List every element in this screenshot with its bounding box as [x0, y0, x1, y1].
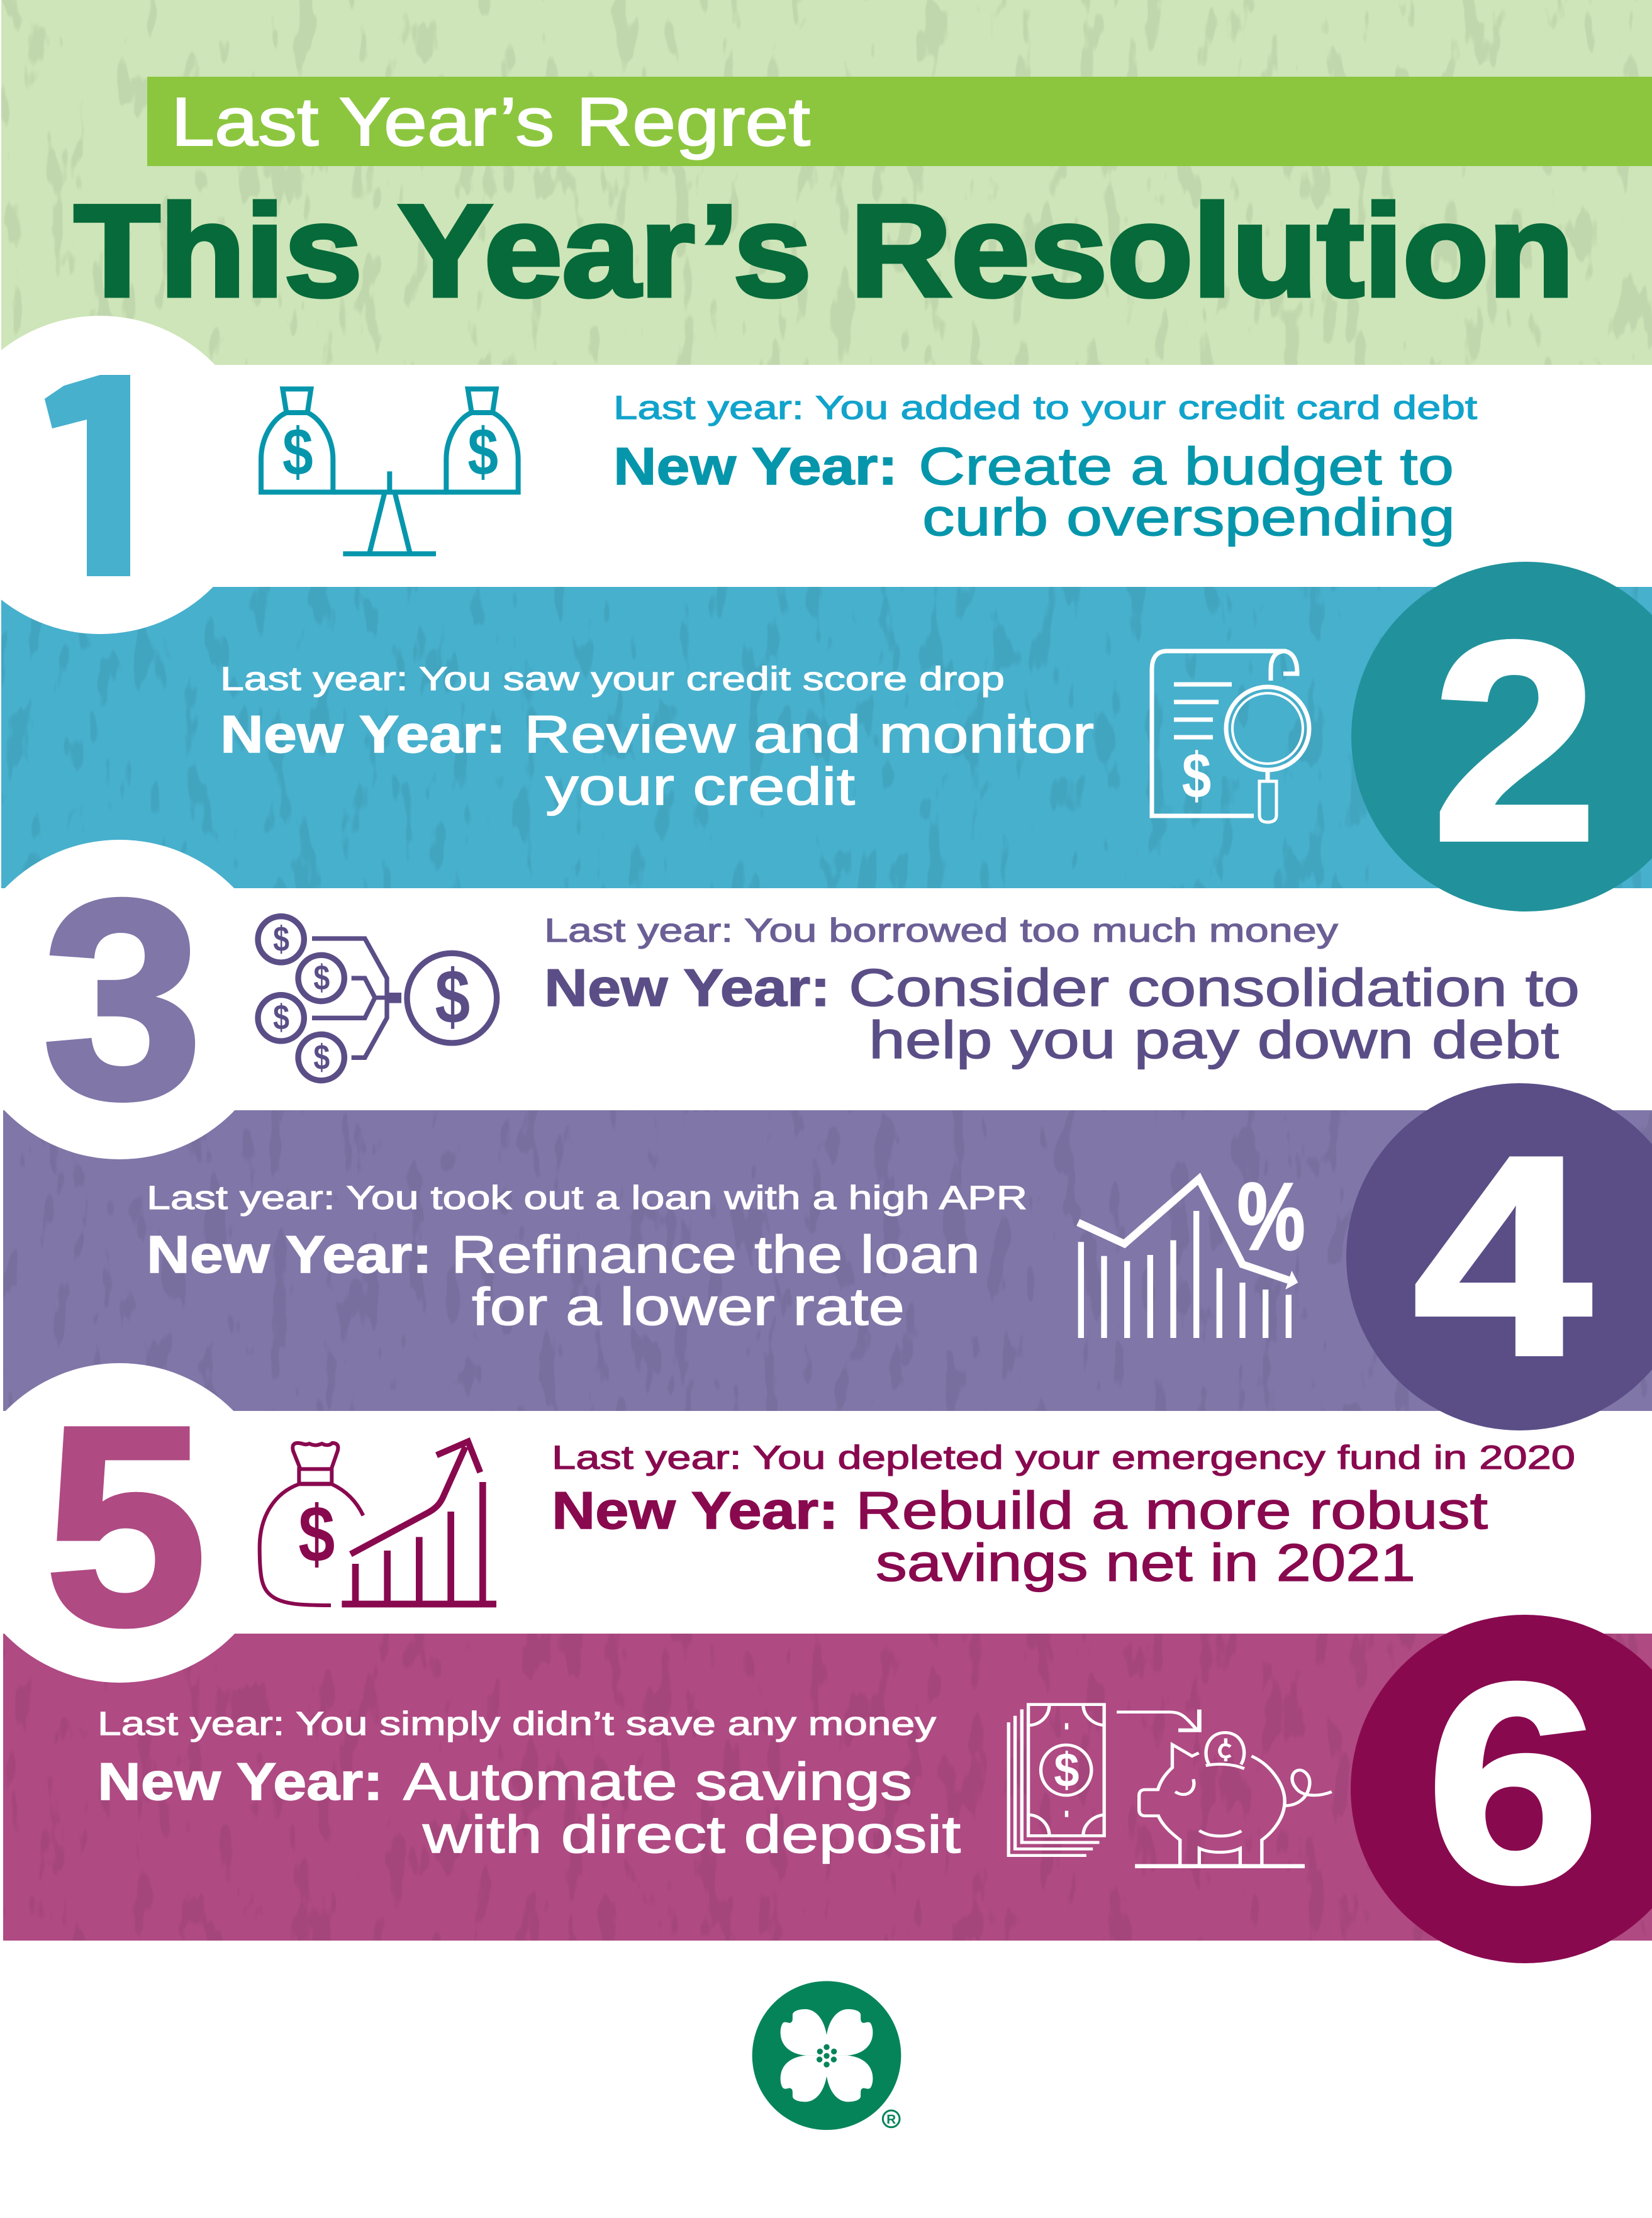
icon: coins consolidating into one: $	[435, 954, 470, 1039]
text block: item 3: help you pay down debt	[869, 1010, 1559, 1069]
text block: item 2: your credit	[545, 757, 855, 816]
badge: number 5	[0, 1363, 279, 1684]
icon: coins consolidating into one: $	[273, 998, 289, 1037]
text block: item 6: with direct deposit	[422, 1805, 961, 1864]
badge: number 2	[1351, 562, 1652, 911]
text block: item 4: New Year:	[147, 1225, 432, 1284]
text block: item 1: Last year: You added to your credit card debt	[613, 389, 1477, 426]
text block: item 6: Automate savings	[403, 1752, 912, 1811]
icon: money bags on a balance: $	[467, 414, 498, 489]
band: row 2 background	[1, 587, 1652, 888]
text block: item 2: Last year: You saw your credit score drop	[220, 660, 1005, 698]
text block: item 1	[613, 389, 1477, 547]
badge: number 5: 5	[45, 1368, 207, 1684]
badge: number 1: 1	[24, 321, 174, 637]
icon: cash going into piggy bank	[1008, 1705, 1332, 1866]
header background	[1, 0, 1652, 365]
icon: coins consolidating into one: $	[313, 1037, 330, 1077]
icon: money bags on a balance	[261, 389, 518, 554]
text block: item 4	[147, 1179, 1027, 1336]
icon: falling rate chart: %	[1237, 1163, 1305, 1269]
text block: item 6	[98, 1705, 961, 1864]
text block: item 3: Last year: You borrowed too much money	[544, 912, 1339, 949]
text block: item 5	[552, 1439, 1575, 1592]
icon: falling rate chart	[1078, 1163, 1305, 1338]
badge: number 3: 3	[42, 842, 203, 1157]
text block: item 5: savings net in 2021	[876, 1533, 1415, 1592]
text block: item 4: Last year: You took out a loan with a high APR	[147, 1179, 1027, 1217]
text block: item 1: New Year:	[613, 437, 898, 496]
badge: number 1	[1, 316, 215, 634]
panel: item 6	[98, 1615, 1652, 1963]
badge: number 2: 2	[1432, 584, 1597, 900]
text block: item 2	[220, 660, 1094, 816]
icon: document and magnifier	[1152, 651, 1309, 822]
panel: item 5	[0, 1363, 1575, 1684]
text block: item 1: Create a budget to	[918, 437, 1454, 496]
text block: item 3	[544, 912, 1580, 1069]
badge: number 3	[0, 840, 279, 1159]
text block: item 2: New Year:	[220, 705, 506, 764]
panel: item 2	[220, 562, 1652, 911]
band: row 6 background	[3, 1634, 1652, 1941]
subtitle banner	[147, 77, 1652, 166]
text block: item 5: New Year:	[552, 1481, 839, 1540]
icon: money bags on a balance: $	[282, 414, 313, 489]
badge: number 4: 4	[1414, 1098, 1593, 1414]
text block: item 5: Rebuild a more robust	[856, 1481, 1488, 1540]
panel: item 4	[147, 1083, 1652, 1430]
text block: item 5: Last year: You depleted your emergency fund in 2020	[552, 1439, 1575, 1476]
icon: cash going into piggy bank: $	[1054, 1743, 1080, 1797]
text block: item 3: New Year:	[544, 958, 830, 1017]
icon: money bag and rising chart	[260, 1442, 496, 1605]
text block: item 2: Review and monitor	[524, 705, 1094, 764]
icon: money bag and rising chart: $	[298, 1489, 335, 1578]
logo: dogwood flower: R	[886, 2112, 896, 2127]
text block: item 6: New Year:	[98, 1752, 383, 1811]
band: row 4 background	[3, 1110, 1652, 1411]
logo: dogwood flower	[752, 1981, 901, 2130]
text block: item 3: Consider consolidation to	[849, 958, 1580, 1017]
badge: number 4	[1346, 1083, 1652, 1430]
title: This Year’s Resolution	[74, 178, 1574, 323]
text block: item 6: Last year: You simply didn’t save any money	[98, 1705, 937, 1742]
subtitle: Last Year's Regret: Last Year’s Regret	[171, 84, 810, 160]
panel: item 1	[0, 316, 1477, 637]
icon: document and magnifier: $	[1182, 740, 1211, 811]
text block: item 1: curb overspending	[922, 488, 1455, 547]
badge: number 6	[1351, 1615, 1652, 1963]
text block: item 4: for a lower rate	[472, 1277, 905, 1336]
text block: item 4: Refinance the loan	[451, 1225, 980, 1284]
panel: item 3	[0, 840, 1580, 1159]
badge: number 6: 6	[1426, 1625, 1600, 1941]
icon: coins consolidating into one: $	[313, 958, 330, 998]
icon: coins consolidating into one	[258, 917, 497, 1081]
icon: coins consolidating into one: $	[273, 919, 289, 959]
